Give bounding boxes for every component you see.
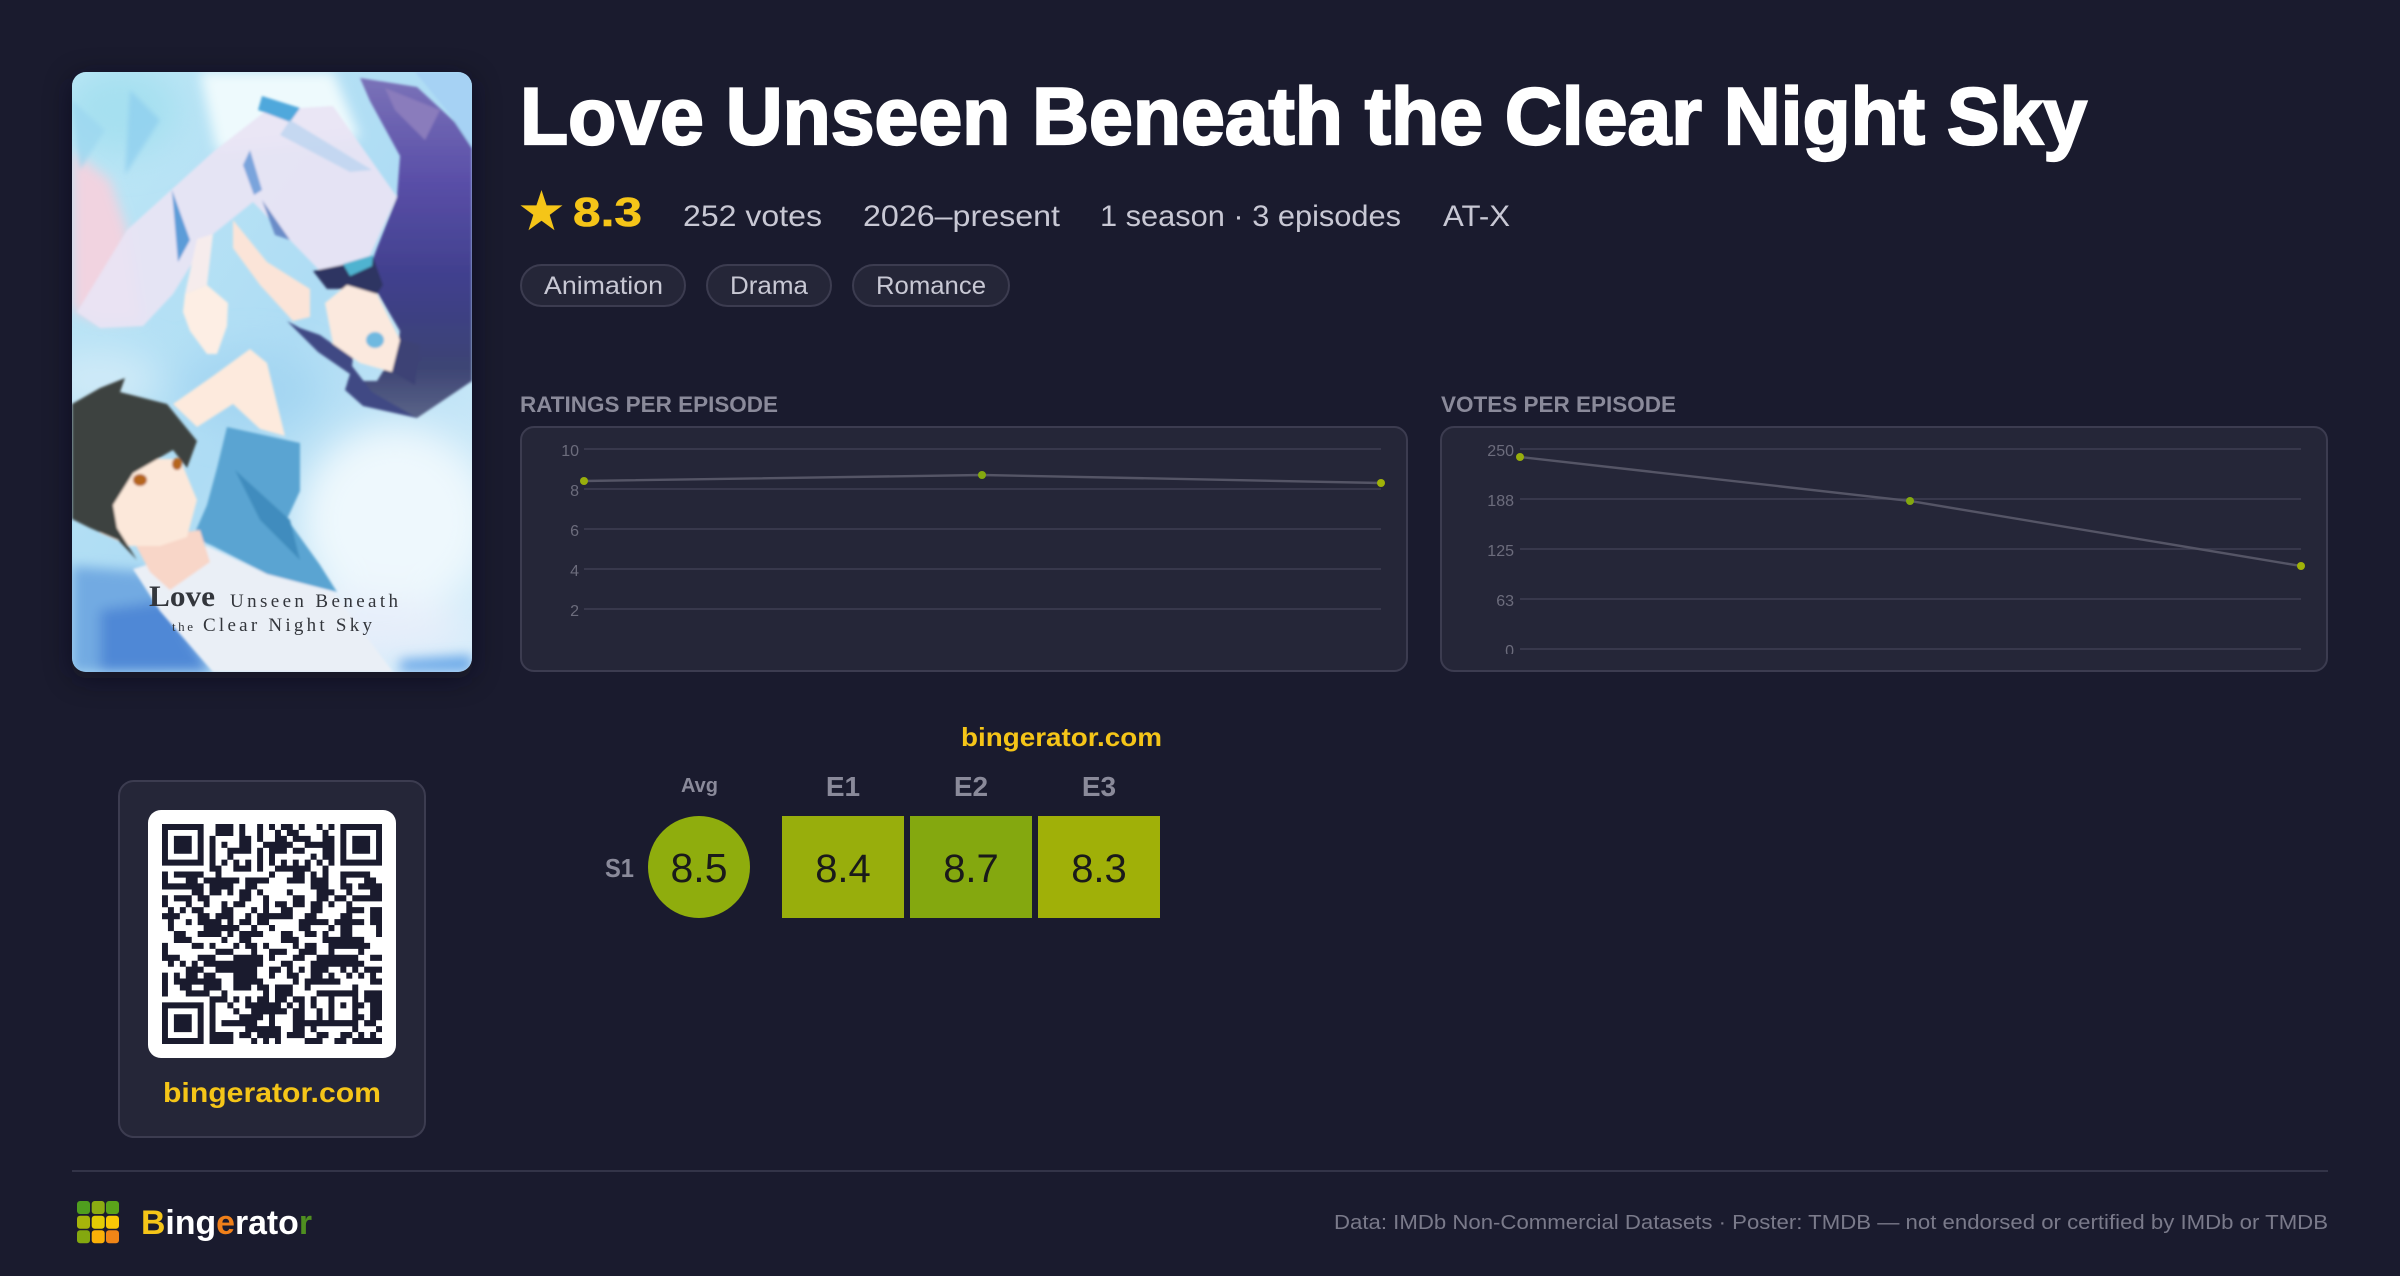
title: Love Unseen Beneath the Clear Night Sky: [520, 72, 2087, 162]
meta row: [520, 189, 1510, 235]
season label: S1: [605, 853, 634, 883]
cell: E2: 8.7: [943, 847, 999, 891]
vote count: 252 votes: [683, 200, 822, 233]
pill: Drama: [707, 265, 831, 306]
season average: 8.5: [670, 845, 728, 891]
QR white plate: [148, 810, 396, 1058]
chart: ratings per episode: [521, 427, 1407, 671]
icon: rating star: [520, 190, 562, 230]
wordmark: Bingerator: [141, 1204, 312, 1242]
column headers: Avg: [681, 775, 718, 797]
chart: ratings per episode: 8: [570, 483, 579, 500]
cell: E1: 8.4: [815, 847, 871, 891]
chart: votes per episode: 0: [1505, 643, 1514, 660]
poster title: the: [172, 619, 193, 634]
icon: heatmap grid: [77, 1201, 119, 1243]
chart: votes per episode: 250: [1487, 443, 1514, 460]
boy: shirt: [133, 546, 393, 672]
chart: votes per episode: 188: [1487, 493, 1514, 510]
network: AT-X: [1443, 200, 1510, 233]
pill: Romance: Romance: [876, 272, 986, 300]
years: 2026–present: [863, 200, 1061, 233]
boy: hair: [72, 378, 197, 560]
chart: ratings per episode: 10: [561, 443, 579, 460]
seasons and episodes: 1 season · 3 episodes: [1100, 200, 1401, 233]
episode heatmap: [605, 771, 1160, 918]
QR code: [162, 827, 382, 1041]
cell: E3: [1038, 816, 1160, 918]
girl: dress: [77, 106, 397, 328]
chart: ratings per episode: 2: [570, 603, 579, 620]
boy: arm, neck, face: [173, 349, 285, 436]
panel: QR card: [119, 781, 425, 1137]
pill: Animation: [521, 265, 685, 306]
footer attribution: Data: IMDb Non-Commercial Datasets · Poster: TMDB — not endorsed or certified by IMDb or TMDB: [1334, 1212, 2328, 1234]
poster title: Clear Night Sky: [203, 615, 372, 636]
heatmap watermark: bingerator.com: [961, 722, 1162, 752]
cell: E3: 8.3: [1071, 847, 1127, 891]
poster shadow: [72, 78, 472, 678]
chart: votes per episode: [1441, 427, 2327, 671]
chart: votes per episode: 125: [1487, 543, 1514, 560]
girl: face and arm: [325, 285, 400, 372]
genre pills: [521, 265, 1009, 306]
poster title: Love: [149, 580, 215, 613]
chart: ratings per episode: 6: [570, 523, 579, 540]
poster title: Unseen Beneath: [230, 591, 398, 612]
pill: Romance: [853, 265, 1009, 306]
column headers: [681, 771, 1116, 802]
poster artwork: [72, 72, 472, 672]
chart: ratings per episode: 4: [570, 563, 579, 580]
pill: Drama: Drama: [730, 272, 808, 300]
column headers: E1: [826, 771, 860, 802]
overall rating: 8.3: [573, 189, 642, 235]
QR caption: bingerator.com: [163, 1077, 381, 1108]
girl: hair: [347, 78, 472, 418]
cell: E1: [782, 816, 904, 918]
chart: votes per episode: 63: [1496, 593, 1514, 610]
cell: E2: [910, 816, 1032, 918]
footer logo: [77, 1201, 312, 1243]
poster title: [150, 586, 398, 635]
column headers: E3: [1082, 771, 1116, 802]
season average: [648, 816, 750, 918]
pill: Animation: Animation: [544, 272, 663, 300]
heading: ratings per episode: RATINGS PER EPISODE: [520, 392, 778, 417]
column headers: E2: [954, 771, 988, 802]
heading: votes per episode: VOTES PER EPISODE: [1441, 392, 1676, 417]
